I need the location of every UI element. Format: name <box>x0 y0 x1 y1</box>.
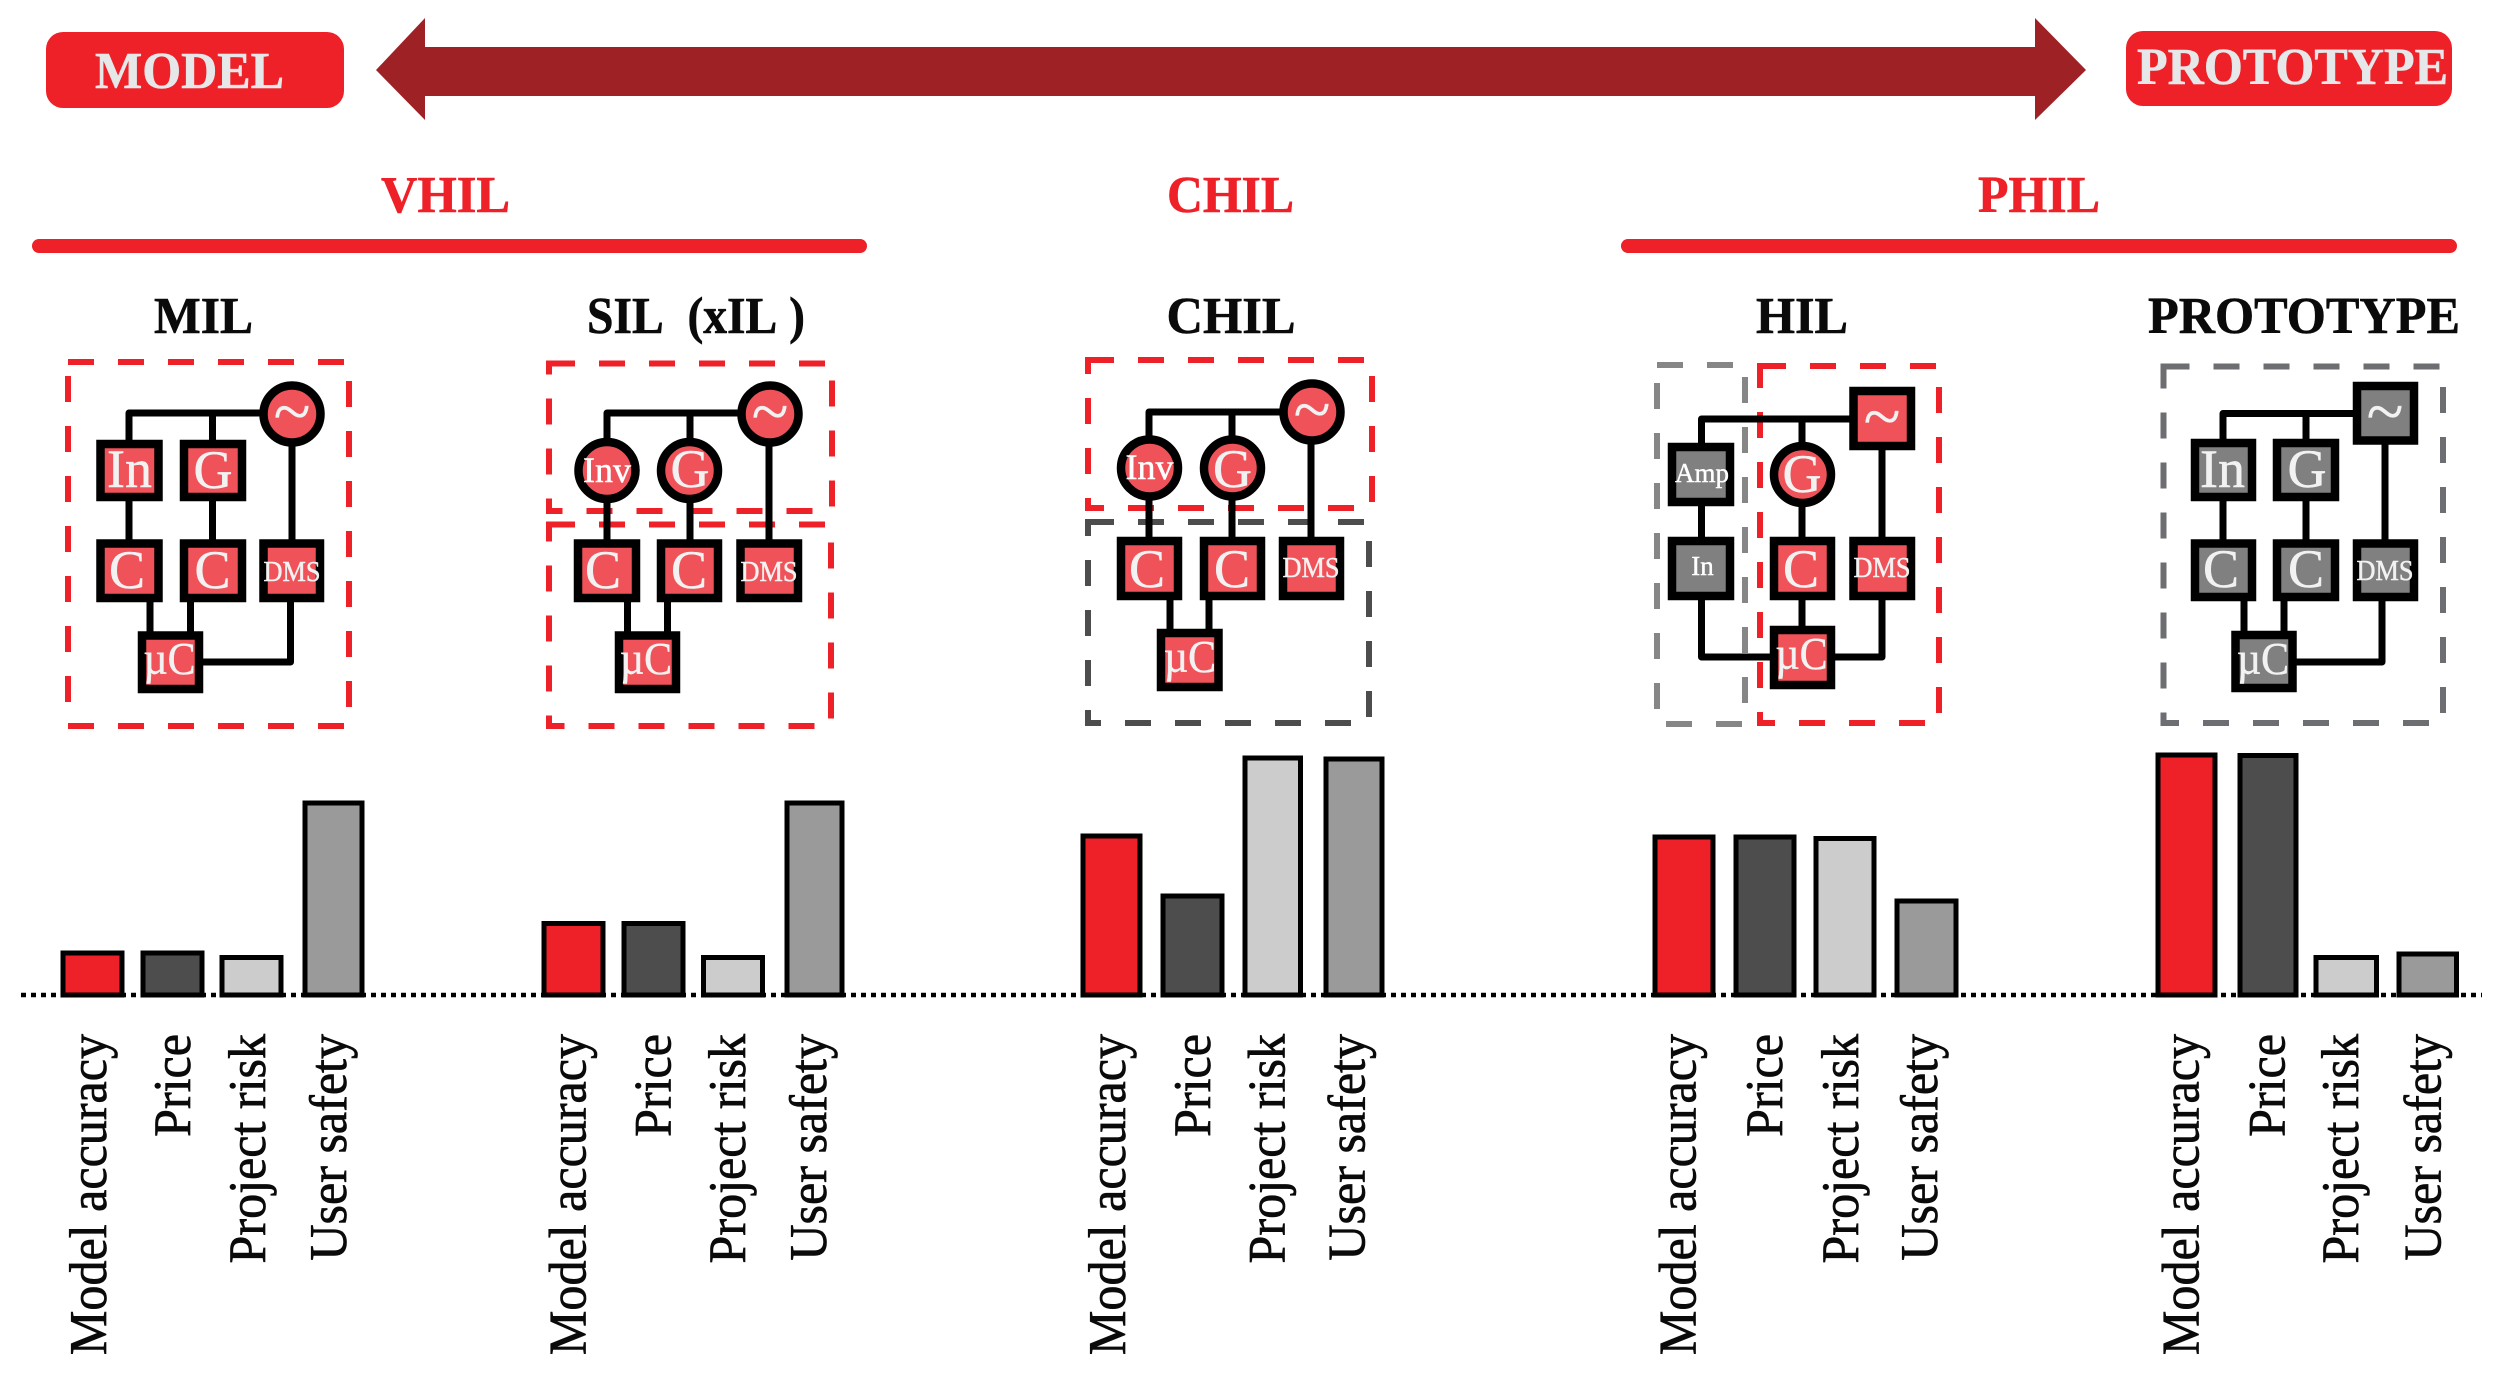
circuit diagram: MIL <box>68 362 349 726</box>
circuit diagram: CHIL: DMS <box>1282 552 1340 584</box>
category: PHIL: PHIL <box>1978 167 2100 224</box>
axis labels: PROTOTYPE: Project risk <box>2312 1034 2370 1263</box>
panel: HIL <box>1649 288 1956 1355</box>
heading: CHIL: CHIL <box>1166 288 1296 345</box>
circuit diagram: CHIL: Inv <box>1126 447 1174 487</box>
bar chart: PROTOTYPE <box>2158 755 2456 995</box>
axis labels: CHIL: Price <box>1164 1034 1222 1137</box>
axis labels: HIL: Project risk <box>1812 1034 1870 1263</box>
category: VHIL <box>32 167 867 253</box>
circuit diagram: CHIL: C <box>1129 539 1165 599</box>
axis labels: MIL: Model accuracy <box>60 1034 118 1355</box>
axis labels: CHIL <box>1079 1034 1377 1355</box>
axis labels: HIL: Price <box>1736 1034 1794 1137</box>
circuit diagram: MIL: C <box>109 540 145 600</box>
circuit diagram: SIL: DMS <box>740 556 798 588</box>
heading: MIL: MIL <box>154 288 253 345</box>
badge: MODEL: MODEL <box>95 43 284 100</box>
bar chart: CHIL <box>1083 758 1382 995</box>
bar chart: HIL <box>1655 837 1956 995</box>
circuit diagram: SIL: C <box>671 540 707 600</box>
panel: MIL <box>60 288 362 1355</box>
badge: PROTOTYPE: PROTOTYPE <box>2137 39 2448 96</box>
circuit diagram: HIL <box>1657 365 1939 724</box>
circuit diagram: SIL: Inv <box>583 450 631 490</box>
circuit diagram: HIL: In <box>1691 551 1714 581</box>
heading: SIL (xIL): SIL (xIL ) <box>587 288 805 345</box>
badge: MODEL <box>46 32 344 108</box>
axis labels: SIL: Project risk <box>699 1034 757 1263</box>
circuit diagram: SIL: G <box>670 439 710 499</box>
axis labels: PROTOTYPE <box>2152 1034 2453 1355</box>
axis labels: SIL: Price <box>624 1034 683 1137</box>
circuit diagram: HIL: G <box>1782 444 1822 504</box>
category: VHIL: VHIL <box>381 167 510 224</box>
circuit diagram: CHIL: µC <box>1164 632 1216 682</box>
axis labels: HIL: User safety <box>1891 1034 1949 1261</box>
panel: CHIL <box>1079 288 1382 1355</box>
circuit diagram: PROTOTYPE <box>2164 366 2443 723</box>
circuit diagram: PROTOTYPE: ~ <box>2367 373 2403 449</box>
category: CHIL: CHIL <box>1167 167 1294 224</box>
circuit diagram: SIL: C <box>585 540 621 600</box>
bar chart: SIL <box>544 803 842 995</box>
circuit diagram: HIL: DMS <box>1854 552 1910 584</box>
circuit diagram: SIL <box>549 364 832 726</box>
double-headed arrow <box>376 18 2086 120</box>
axis labels: MIL: User safety <box>300 1034 358 1261</box>
chart baseline <box>21 993 2482 997</box>
axis labels: SIL <box>539 1034 838 1355</box>
panel: SIL <box>539 288 842 1355</box>
axis labels: CHIL: User safety <box>1318 1034 1377 1261</box>
circuit diagram: MIL: ~ <box>274 373 310 449</box>
circuit diagram: CHIL: ~ <box>1294 371 1330 447</box>
circuit diagram: MIL: DMS <box>264 556 320 588</box>
axis labels: SIL: Model accuracy <box>539 1034 598 1355</box>
circuit diagram: PROTOTYPE: DMS <box>2356 555 2414 587</box>
circuit diagram: HIL: ~ <box>1864 378 1900 454</box>
circuit diagram: MIL: µC <box>144 634 196 684</box>
panel: PROTOTYPE <box>2148 288 2460 1355</box>
axis labels: PROTOTYPE: Price <box>2238 1034 2297 1137</box>
axis labels: SIL: User safety <box>780 1034 838 1261</box>
heading: HIL: HIL <box>1756 288 1848 345</box>
circuit diagram: CHIL <box>1088 360 1372 723</box>
circuit diagram: SIL: µC <box>620 634 672 684</box>
axis labels: HIL: Model accuracy <box>1649 1034 1708 1355</box>
circuit diagram: PROTOTYPE: C <box>2203 539 2239 599</box>
circuit diagram: PROTOTYPE: C <box>2288 539 2324 599</box>
axis labels: CHIL: Model accuracy <box>1079 1034 1137 1355</box>
axis labels: HIL <box>1649 1034 1949 1355</box>
axis labels: MIL: Price <box>144 1034 202 1137</box>
axis labels: PROTOTYPE: User safety <box>2394 1034 2453 1261</box>
circuit diagram: SIL: ~ <box>752 373 788 449</box>
circuit diagram: HIL: C <box>1783 539 1819 599</box>
circuit diagram: MIL: C <box>194 540 231 600</box>
axis labels: PROTOTYPE: Model accuracy <box>2152 1034 2211 1355</box>
circuit diagram: CHIL: C <box>1214 539 1250 599</box>
circuit diagram: PROTOTYPE: G <box>2288 439 2326 499</box>
axis labels: MIL <box>60 1034 358 1355</box>
circuit diagram: PROTOTYPE: µC <box>2237 634 2289 684</box>
axis labels: MIL: Project risk <box>219 1034 277 1263</box>
circuit diagram: MIL: G <box>194 440 232 500</box>
circuit diagram: CHIL: G <box>1213 439 1252 499</box>
heading: PROTOTYPE: PROTOTYPE <box>2148 288 2460 345</box>
circuit diagram: HIL: µC <box>1776 629 1828 679</box>
category: PHIL <box>1621 167 2457 253</box>
bar chart: MIL <box>63 803 362 995</box>
axis labels: CHIL: Project risk <box>1238 1034 1297 1263</box>
circuit diagram: PROTOTYPE: In <box>2200 439 2245 499</box>
circuit diagram: HIL: Amp <box>1675 458 1729 488</box>
circuit diagram: MIL: In <box>107 439 152 499</box>
